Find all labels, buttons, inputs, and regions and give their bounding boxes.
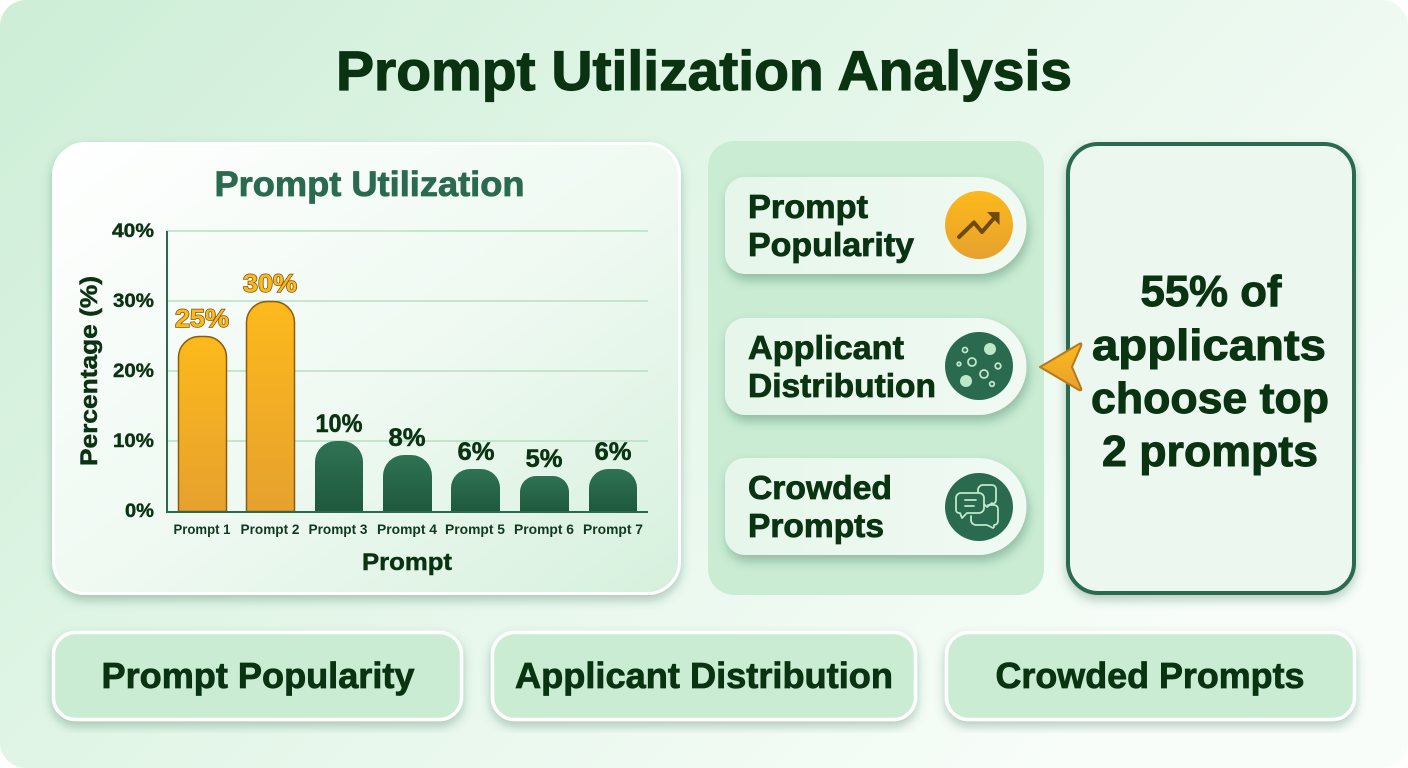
y axis title: Percentage (%) [76, 276, 103, 466]
bottom label: applicant distribution [492, 632, 916, 720]
y axis labels: 20% [113, 361, 154, 382]
icon: chat bubbles [945, 473, 1013, 541]
factor label: Popularity [748, 226, 915, 263]
axes [167, 231, 648, 512]
factor label: Distribution [748, 367, 936, 404]
takeaway text: applicants [1092, 321, 1326, 370]
factor: applicant distribution [725, 318, 1026, 415]
takeaway text: 2 prompts [1102, 427, 1318, 476]
factor label: Crowded [748, 469, 892, 506]
icon: scattered dots [945, 332, 1013, 400]
bottom label: applicant distribution: Applicant Distribution [515, 655, 893, 696]
factor label [748, 329, 936, 404]
bottom label: prompt popularity [54, 632, 462, 720]
x axis labels: Prompt 4 [377, 521, 437, 537]
bars [178, 302, 637, 512]
panel: bar chart [54, 144, 680, 594]
x axis labels: Prompt 7 [583, 521, 643, 537]
x axis labels: Prompt 6 [514, 521, 574, 537]
x axis title: Prompt [362, 549, 452, 576]
factor label [748, 188, 915, 263]
bottom label: crowded prompts: Crowded Prompts [996, 655, 1304, 696]
y axis labels: 40% [112, 221, 154, 242]
title: Prompt Utilization Analysis [336, 39, 1072, 102]
value labels [175, 270, 632, 473]
factor label: Prompts [748, 507, 884, 544]
panel: factors [708, 141, 1044, 595]
value labels: 10% [316, 410, 362, 438]
value labels: 5% [526, 445, 562, 473]
x axis labels: Prompt 2 [240, 521, 300, 537]
factor: crowded prompts [725, 458, 1026, 555]
takeaway text: choose top [1091, 374, 1329, 423]
value labels: 8% [388, 424, 426, 452]
value labels: 6% [458, 438, 494, 466]
panel: key takeaway [1068, 144, 1354, 593]
value labels: 30% [243, 270, 297, 298]
y axis labels: 0% [125, 501, 154, 522]
x axis labels: Prompt 5 [445, 521, 505, 537]
bottom label: prompt popularity: Prompt Popularity [102, 655, 414, 696]
value labels: 6% [594, 438, 632, 466]
bottom label: crowded prompts [946, 632, 1354, 720]
x axis labels: Prompt 3 [308, 521, 368, 537]
value labels: 25% [175, 305, 229, 333]
arrow [1040, 343, 1081, 390]
y axis labels [112, 221, 154, 522]
x axis labels [174, 521, 643, 537]
icon: trending up [945, 191, 1013, 259]
y axis labels: 10% [113, 431, 154, 452]
factor label: Applicant [748, 329, 904, 366]
takeaway text [1091, 267, 1329, 476]
chart title: Prompt Utilization [214, 165, 524, 204]
bar chart [76, 221, 648, 576]
factor: prompt popularity [725, 177, 1026, 274]
takeaway text: 55% of [1140, 267, 1282, 316]
x axis labels: Prompt 1 [174, 521, 231, 537]
factor label: Prompt [748, 188, 868, 225]
factor label [748, 469, 892, 544]
y axis labels: 30% [113, 291, 154, 312]
